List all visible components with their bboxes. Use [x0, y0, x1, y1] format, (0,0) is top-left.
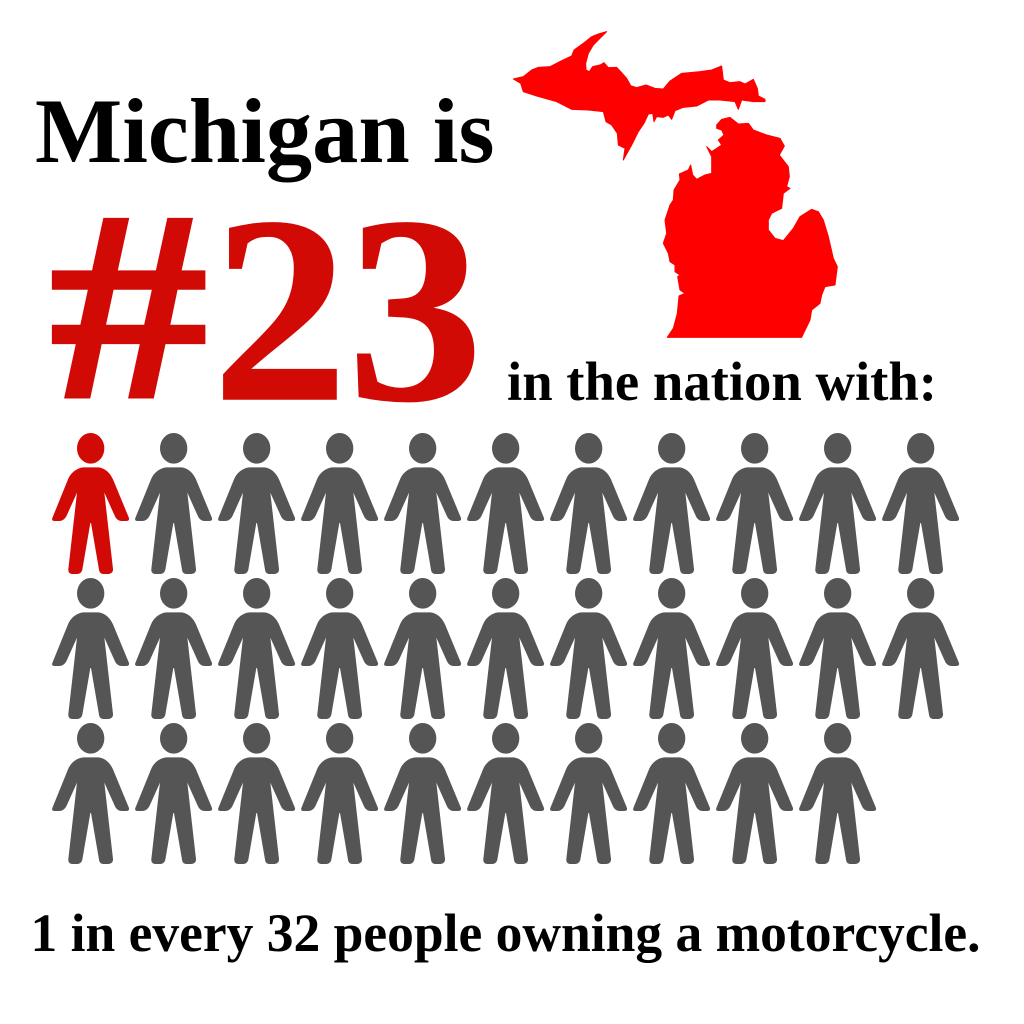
rank: #23	[50, 155, 483, 457]
icon: Michigan state map	[513, 32, 837, 337]
rank: #23: #	[50, 155, 208, 456]
caption: 1 in every 32: 1 in every 32 people owning a motorcycle.	[30, 903, 980, 963]
row 2: gray people	[52, 578, 959, 719]
title: Michigan is: Michigan is	[35, 80, 494, 182]
row 3: gray people	[52, 723, 876, 864]
pictogram: 32 people	[52, 433, 959, 864]
icon: highlighted red person	[52, 433, 129, 574]
row 1: gray people	[135, 433, 959, 574]
rank: #23: 23	[212, 162, 483, 457]
text: in the nation with: in the nation with:	[507, 351, 937, 412]
